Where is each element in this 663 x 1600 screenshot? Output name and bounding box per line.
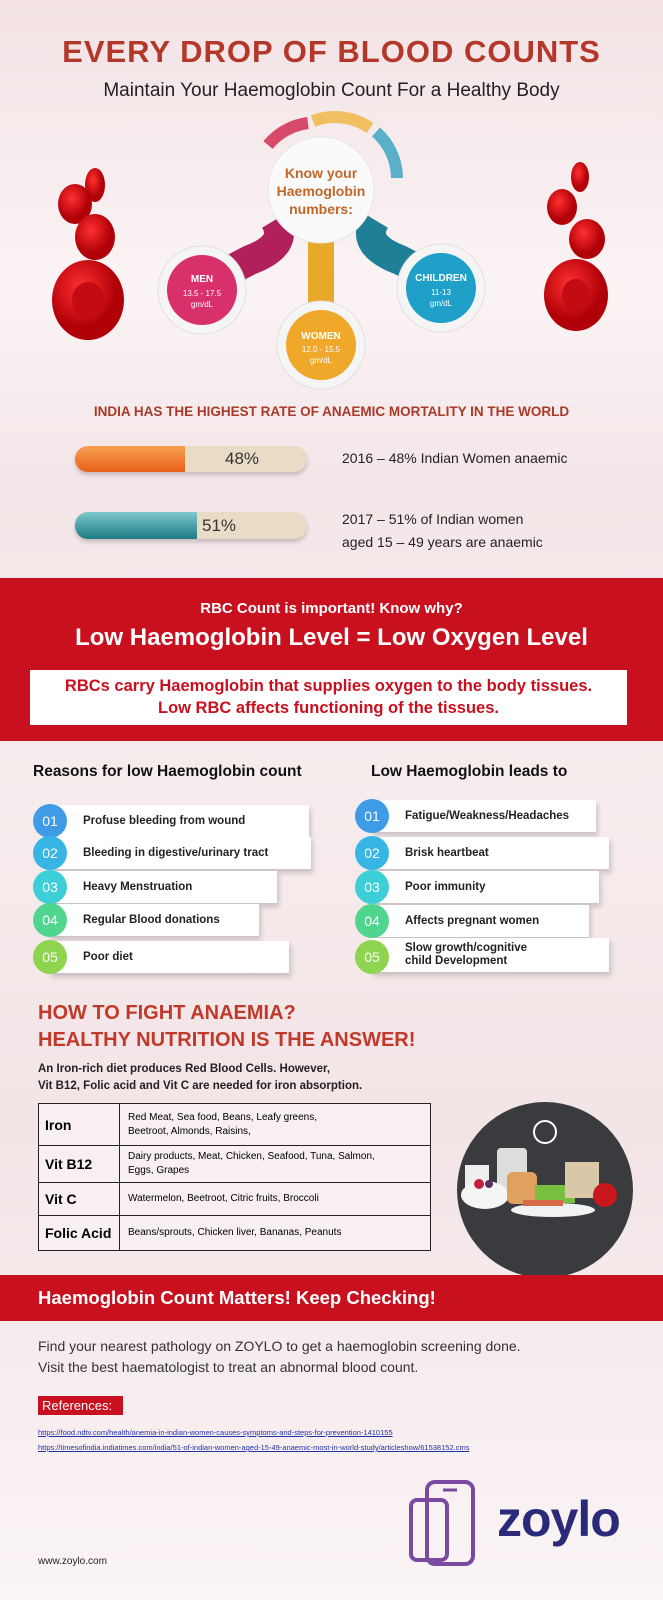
list: effects: Slow growth/cognitive [405,942,527,954]
hub diagram: gm/dL [191,300,214,309]
bar 48%: 48% [225,449,259,468]
list: reasons: Regular Blood donations [83,914,220,926]
hub diagram: Know your [285,165,358,181]
reference links: https://timesofindia.indiatimes.com/india/51-of-indian-women-aged-15-49-anaemic-most-in-world-study/articleshow/61538152.cms [38,1443,469,1452]
text 2017 [342,511,543,550]
panel: red banner keep checking [0,1275,663,1321]
list: reasons: 05 [42,949,58,965]
table: nutrition: Vit C [45,1191,77,1207]
list: effects [355,799,614,978]
list: reasons: 01 [42,813,58,829]
list: reasons: Heavy Menstruation [83,880,192,892]
hub diagram: WOMEN [301,331,341,342]
bar 48% [75,446,307,472]
hub diagram: 12.0 - 15.5 [302,345,341,354]
list: reasons: 03 [42,879,58,895]
table: nutrition: Iron [45,1116,71,1132]
list: effects: 03 [364,879,380,895]
list: reasons: Poor diet [83,950,133,962]
text 2017: 2017 – 51% of Indian women [342,511,523,527]
hub diagram: gm/dL [430,299,453,308]
hub diagram: CHILDREN [415,273,467,284]
table: nutrition: Eggs, Grapes [128,1165,189,1176]
hub diagram: numbers: [289,201,353,217]
footer url: www.zoylo.com [38,1556,107,1567]
white box [30,670,627,725]
text: iron diet: Vit B12, Folic acid and Vit C are needed for iron absorption. [38,1080,362,1092]
hub diagram: gm/dL [310,356,333,365]
list: effects: 01 [364,808,380,824]
text: find pathology: Find your nearest pathology on ZOYLO to get a haemoglobin screening done. [38,1338,521,1354]
text 2017: aged 15 – 49 years are anaemic [342,534,543,550]
table: nutrition: Red Meat, Sea food, Beans, Leafy greens, [128,1112,317,1122]
list: reasons [33,804,316,980]
panel: red banner keep checking: Haemoglobin Count Matters! Keep Checking! [38,1287,436,1308]
logo: zoylo: zoylo [497,1491,620,1547]
list: effects: 02 [364,845,380,861]
bar 51%: 51% [202,516,236,535]
RBC subheading: RBC Count is important! Know why? [200,600,463,617]
list: effects: 05 [364,949,380,965]
list: effects: Fatigue/Weakness/Headaches [405,810,569,822]
table: nutrition: Folic Acid [45,1225,111,1241]
table: nutrition [38,1103,431,1251]
text: iron diet: An Iron-rich diet produces Red Blood Cells. However, [38,1063,330,1075]
table: nutrition: Watermelon, Beetroot, Citric fruits, Broccoli [128,1193,319,1204]
list: effects: Poor immunity [405,880,486,892]
list: effects: 04 [364,913,380,929]
icon: blood cells right [544,162,608,331]
list: effects: child Development [405,955,507,967]
hub diagram [158,111,486,390]
table: nutrition: Vit B12 [45,1156,92,1172]
subtitle: Maintain Your Haemoglobin Count For a Healthy Body [103,80,560,101]
list: reasons: 02 [42,845,58,861]
icon: food plate circle [457,1102,633,1275]
text 2016: 2016 – 48% Indian Women anaemic [342,450,567,466]
icon: blood cells left [52,168,124,340]
hub diagram: MEN [191,274,213,285]
logo: zoylo [409,1480,620,1566]
big heading: Low Haemoglobin Level = Low Oxygen Level [75,624,588,651]
text: iron diet [38,1063,362,1092]
references label [38,1396,123,1415]
list: reasons: 04 [42,912,58,928]
heading: fight anaemia: HOW TO FIGHT ANAEMIA? [38,1002,296,1024]
text: find pathology: Visit the best haematologist to treat an abnormal blood count. [38,1359,418,1375]
white box: Low RBC affects functioning of the tissues. [158,699,499,717]
title: EVERY DROP OF BLOOD COUNTS [62,34,601,69]
white box: RBCs carry Haemoglobin that supplies oxygen to the body tissues. [65,677,592,695]
heading: fight anaemia: HEALTHY NUTRITION IS THE ANSWER! [38,1029,415,1051]
list: effects: Brisk heartbeat [405,846,489,858]
list: effects: Affects pregnant women [405,914,539,926]
references label: References: [42,1398,112,1413]
heading: fight anaemia [38,1002,415,1051]
hub diagram: Haemoglobin [277,183,365,199]
hub diagram: 11-13 [431,288,451,297]
list: reasons: Profuse bleeding from wound [83,814,245,826]
table: nutrition: Beetroot, Almonds, Raisins, [128,1126,251,1136]
panel: RBC red band [0,578,663,741]
heading: reasons: Reasons for low Haemoglobin count [33,763,302,780]
heading: India mortality: INDIA HAS THE HIGHEST RATE OF ANAEMIC MORTALITY IN THE WORLD [94,404,569,419]
table: nutrition: Dairy products, Meat, Chicken, Seafood, Tuna, Salmon, [128,1151,375,1162]
text: find pathology [38,1338,521,1375]
table: nutrition: Beans/sprouts, Chicken liver, Bananas, Peanuts [128,1227,341,1238]
reference links: https://food.ndtv.com/health/anemia-in-indian-women-causes-symptoms-and-steps-for-prevention-1410155 [38,1428,393,1437]
heading: leads to: Low Haemoglobin leads to [371,763,567,780]
reference links [38,1428,470,1452]
list: reasons: Bleeding in digestive/urinary tract [83,846,268,858]
hub diagram: 13.5 - 17.5 [183,289,222,298]
bar 51% [75,512,307,539]
